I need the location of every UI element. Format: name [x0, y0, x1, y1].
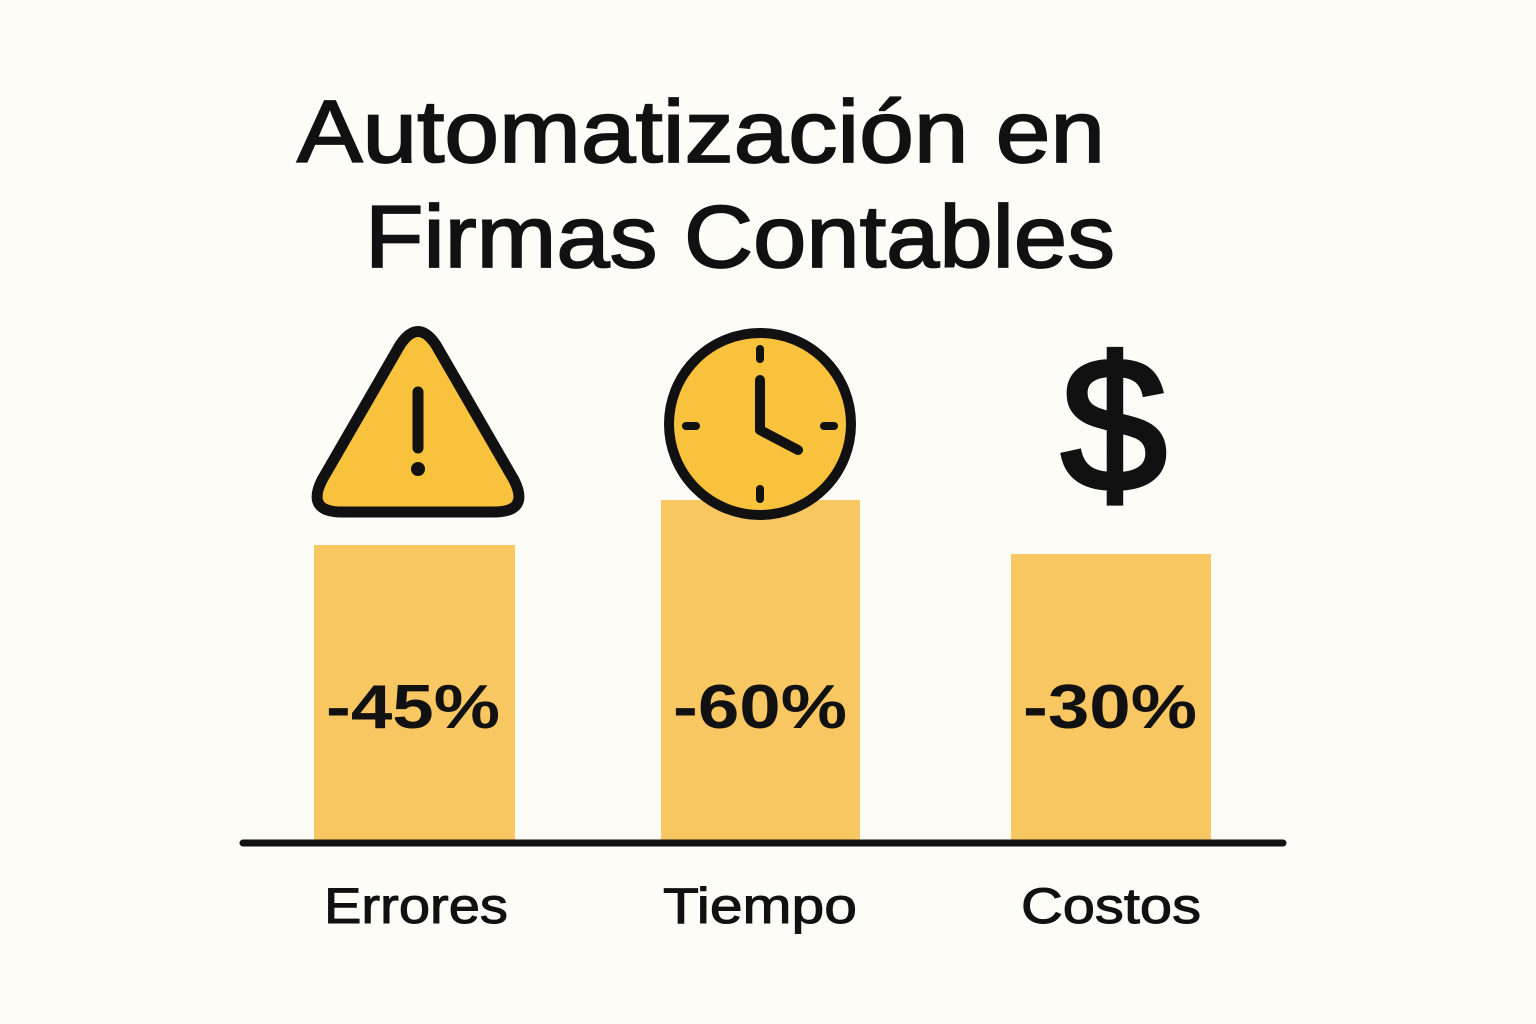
label: Errores: Errores: [324, 878, 508, 934]
value: -30%: -30%: [1023, 673, 1197, 742]
label: Tiempo: Tiempo: [663, 878, 857, 934]
title: Automatización en: [297, 82, 1105, 181]
bar: costos: [1011, 554, 1211, 840]
icon: clock: [669, 333, 851, 515]
label: Costos: Costos: [1021, 878, 1201, 934]
title: [297, 82, 1115, 286]
value: -45%: -45%: [326, 673, 500, 742]
value: -60%: -60%: [673, 673, 847, 742]
icon: warning triangle: [317, 332, 519, 512]
axis baseline: [243, 840, 1283, 846]
bar: errores: [314, 545, 515, 840]
bar: tiempo: [661, 500, 860, 840]
icon: dollar: $: [1061, 319, 1167, 531]
title: Firmas Contables: [365, 187, 1115, 286]
